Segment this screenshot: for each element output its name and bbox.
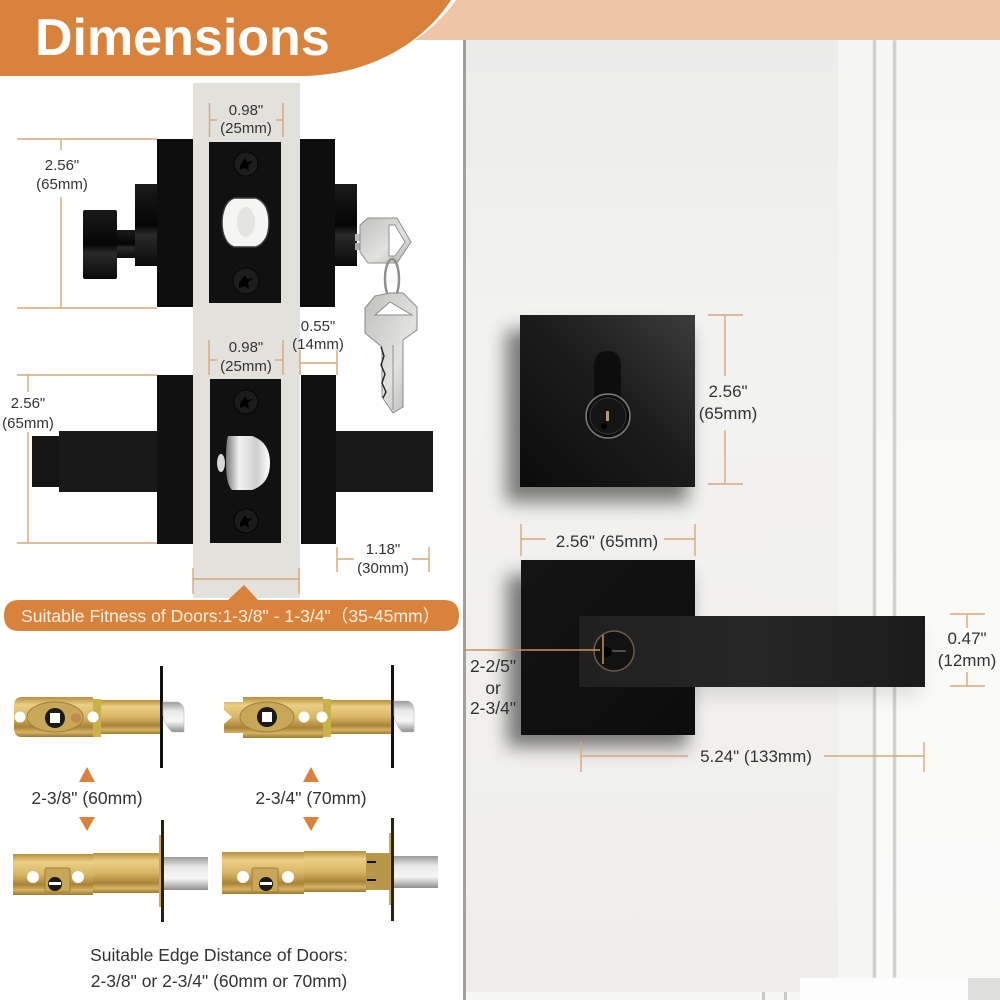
dimension: projection 1.18: 1.18" <box>366 541 400 558</box>
dimension: deadbolt top 0.98: 0.98" <box>229 102 263 119</box>
icon: keys <box>355 218 417 413</box>
dimension: deadbolt plate height: 2.56" <box>708 382 748 401</box>
dimension: backset: or <box>485 678 501 698</box>
header: peach band <box>415 0 1000 40</box>
dimension: lever top 0.98 <box>209 339 283 375</box>
dimension: rosette 0.55 <box>292 318 344 375</box>
latch: 70mm side view <box>224 665 414 768</box>
latch faceplate <box>210 379 281 543</box>
title: Dimensions <box>35 9 330 67</box>
panel: lever on door <box>463 524 996 772</box>
lever handle <box>579 616 925 687</box>
text: edge distance note: 2-3/8" or 2-3/4" (60mm or 70mm) <box>91 971 347 991</box>
dimension: lever top 0.98: (25mm) <box>220 358 272 375</box>
dimension: lever height: 0.47" <box>947 629 987 648</box>
panel: deadbolt on door <box>506 315 757 502</box>
dimension: backset <box>463 635 603 718</box>
dimension: lever height: (12mm) <box>938 651 996 670</box>
dimension: projection 1.18 <box>337 541 429 577</box>
deadbolt plate <box>520 315 695 487</box>
dimension: deadbolt plate height: (65mm) <box>699 404 757 423</box>
dimension: deadbolt top 0.98: (25mm) <box>220 120 272 137</box>
deadbolt rosettes <box>157 139 357 307</box>
door background <box>463 40 1000 1000</box>
text: edge distance note <box>90 945 348 991</box>
deadbolt faceplate <box>209 142 281 303</box>
dimension: plate width: 2.56" (65mm) <box>556 532 658 551</box>
callout: door thickness <box>4 585 459 631</box>
dimension: backset: 2-2/5" <box>470 656 516 676</box>
arrows: 60mm label: 2-3/8" (60mm) <box>31 788 143 808</box>
dimension: deadbolt top 0.98 <box>210 102 283 137</box>
dimension: backset: 2-3/4" <box>470 698 516 718</box>
dimension: deadbolt height 2.56: 2.56" <box>45 157 79 174</box>
deadbolt thumbturn <box>83 184 157 279</box>
lever plate <box>521 560 695 735</box>
dimension: deadbolt height 2.56: (65mm) <box>36 176 88 193</box>
dimension: lever height <box>938 614 996 686</box>
dimension: rosette 0.55: 0.55" <box>301 318 335 335</box>
callout: door thickness: Suitable Fitness of Doors:1-3/8" - 1-3/4"（35-45mm） <box>21 606 440 626</box>
header: orange banner <box>0 0 451 76</box>
arrows: 60mm label <box>31 767 143 831</box>
dimension: deadbolt plate height <box>699 315 757 484</box>
panel: lever side view <box>2 318 433 594</box>
dimension: lever length <box>581 742 924 772</box>
dimension: plate width <box>521 524 695 556</box>
lever handles <box>32 431 433 492</box>
dimension: projection 1.18: (30mm) <box>357 560 409 577</box>
arrows: 70mm label: 2-3/4" (70mm) <box>255 788 367 808</box>
door edge strip <box>193 83 300 598</box>
lever keyhole <box>594 631 634 671</box>
dimension: lever height 2.56 <box>2 375 157 543</box>
text: edge distance note: Suitable Edge Distance of Doors: <box>90 945 348 965</box>
latch: 70mm top view <box>222 818 438 921</box>
dimension: rosette 0.55: (14mm) <box>292 336 344 353</box>
arrows: 70mm label <box>255 767 367 831</box>
latch: 60mm top view <box>13 820 208 922</box>
dimension: deadbolt height 2.56 <box>17 139 157 308</box>
deadbolt keyhole <box>586 351 630 438</box>
latch: 60mm side view <box>14 666 184 768</box>
dimension: lever height 2.56: (65mm) <box>2 415 54 432</box>
dimension: lever length: 5.24" (133mm) <box>700 747 812 766</box>
panel: deadbolt side view <box>17 83 417 598</box>
dimension: lever height 2.56: 2.56" <box>11 395 45 412</box>
lever rosettes <box>157 375 336 544</box>
dimension: door thickness <box>193 568 299 594</box>
dimension: lever top 0.98: 0.98" <box>229 339 263 356</box>
